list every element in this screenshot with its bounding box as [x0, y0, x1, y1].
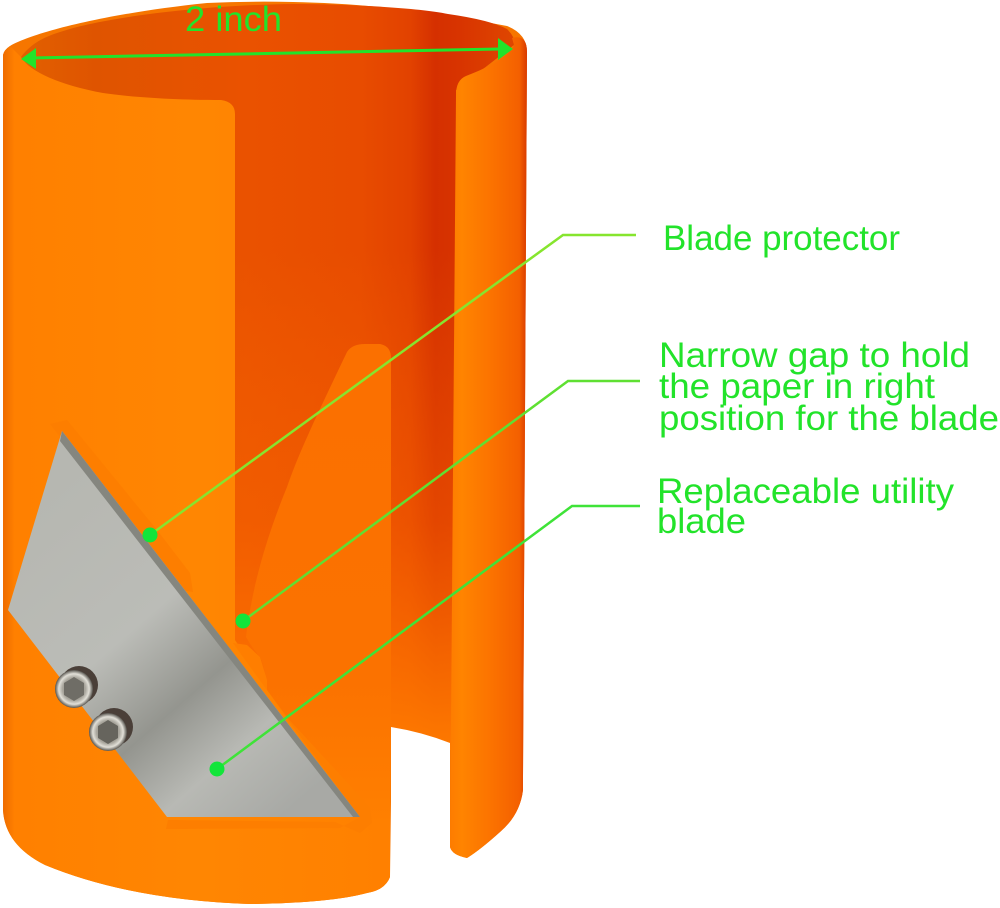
screw one	[55, 666, 98, 708]
slot lower glow	[235, 250, 456, 750]
dimension arrow: 2 inch	[21, 38, 513, 69]
dimension label: 2 inch	[185, 0, 282, 39]
right prong	[450, 37, 527, 858]
label: replaceable blade: Replaceable utility	[657, 472, 955, 511]
fin: narrow gap guide	[246, 344, 391, 830]
label: replaceable blade: blade	[657, 502, 746, 541]
label: narrow gap: Narrow gap to hold	[659, 336, 970, 375]
arrow head left	[21, 48, 36, 69]
label: narrow gap: the paper in right	[659, 367, 935, 406]
cylinder outer silhouette	[3, 2, 527, 904]
blade plate	[8, 431, 360, 817]
arrow shaft	[30, 49, 500, 58]
cylinder body	[3, 2, 527, 904]
blade sharpened edge	[60, 431, 360, 817]
cylinder inner wall and slot	[21, 4, 514, 745]
blade protector ridge	[50, 420, 372, 833]
leader: blade protector	[142, 235, 636, 542]
white notch at bottom	[391, 727, 450, 880]
label: narrow gap: position for the blade	[659, 399, 999, 438]
screw two	[89, 708, 133, 751]
leader: narrow gap	[236, 381, 640, 628]
left front panel	[3, 46, 390, 904]
arrow head right	[498, 38, 513, 60]
label: narrow gap	[659, 336, 999, 438]
label: replaceable blade	[657, 472, 955, 541]
label: blade protector: Blade protector	[663, 219, 900, 258]
leader: replaceable blade	[210, 506, 640, 776]
utility blade	[8, 431, 360, 817]
